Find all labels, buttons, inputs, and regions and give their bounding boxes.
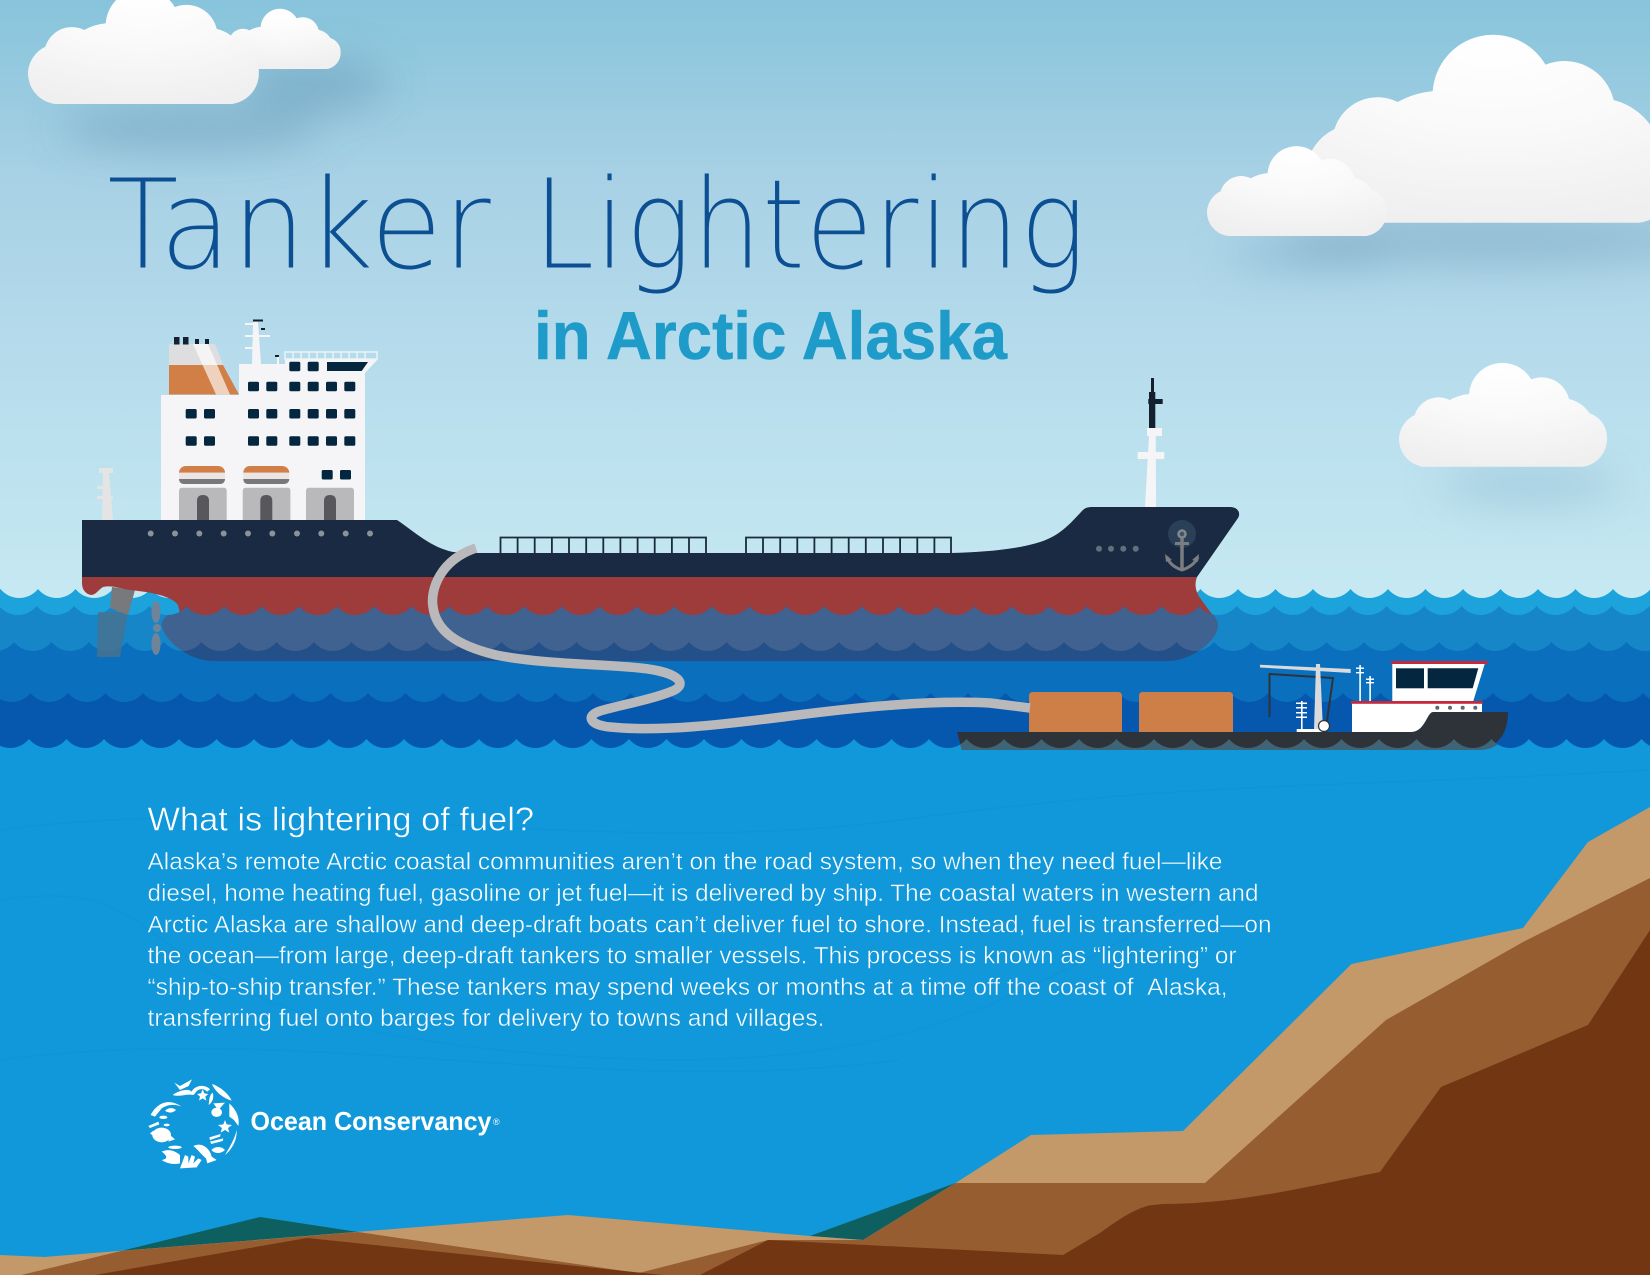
propeller xyxy=(152,601,161,655)
orange cargo tank right xyxy=(1139,692,1233,732)
body text: diesel, home heating fuel, gasoline or jet fuel—it is delivered by ship. The coastal waters in western and xyxy=(148,880,1258,907)
orange cargo tank left xyxy=(1029,692,1122,732)
body text: Alaska’s remote Arctic coastal communities aren’t on the road system, so when they need fuel—like xyxy=(148,848,1222,876)
tan right slope xyxy=(780,807,1650,1275)
rear mast xyxy=(97,468,113,520)
tan left hill xyxy=(0,1215,863,1275)
cloud: front left xyxy=(28,0,259,104)
logo wordmark: Ocean Conservancy xyxy=(250,1106,492,1136)
tug hull xyxy=(1352,703,1482,732)
teal back hills xyxy=(121,1183,956,1251)
bridge railing xyxy=(285,352,377,359)
body text: “ship-to-ship transfer.” These tankers may spend weeks or months at a time off the coast of Alaska, xyxy=(148,974,1228,1001)
bow portholes xyxy=(1096,546,1139,552)
deck railings xyxy=(500,538,951,554)
cloud shadows xyxy=(60,59,1650,505)
hull portholes xyxy=(148,530,373,536)
forward mast xyxy=(1138,378,1164,507)
lifeboats xyxy=(179,466,289,484)
seabed terrain xyxy=(0,807,1650,1275)
funnel xyxy=(169,337,239,394)
barge and tugboat xyxy=(957,661,1508,750)
body text xyxy=(148,848,1272,1032)
underwater hull xyxy=(162,606,1218,661)
doors xyxy=(179,488,354,520)
barge hull xyxy=(957,712,1508,750)
dark brown left hill xyxy=(95,1238,663,1275)
icon: ring of sea creatures xyxy=(148,1079,239,1168)
body text: Arctic Alaska are shallow and deep-draft boats can’t deliver fuel to shore. Instead, fuel is transferred—on xyxy=(148,912,1272,938)
cloud: small right xyxy=(1207,146,1387,236)
fuel transfer hose xyxy=(432,548,1030,729)
cloud: lower right xyxy=(1399,363,1607,467)
crane xyxy=(1260,664,1351,732)
navy upper hull xyxy=(82,507,1239,577)
cloud: small back left xyxy=(220,9,341,69)
radar mast xyxy=(245,320,279,365)
title: Lightering xyxy=(533,153,1086,298)
body text: transferring fuel onto barges for delivery to towns and villages. xyxy=(148,1005,824,1032)
logo: Ocean Conservancy xyxy=(148,1079,500,1168)
mid brown right slope xyxy=(631,878,1650,1275)
superstructure xyxy=(161,359,378,520)
red lower hull xyxy=(82,577,1214,622)
title xyxy=(107,153,1086,298)
dark brown right slope xyxy=(700,930,1650,1275)
tanker ship xyxy=(0,320,1650,1178)
tug portholes xyxy=(1435,706,1477,710)
superstructure windows xyxy=(186,362,368,480)
section heading: What is lightering of fuel? xyxy=(148,800,534,838)
deck antennas xyxy=(1296,665,1374,730)
registered mark: ® xyxy=(493,1117,500,1127)
title: Tanker xyxy=(107,153,492,298)
barge underwater hull xyxy=(960,739,1498,750)
body text: the ocean—from large, deep-draft tankers to smaller vessels. This process is known as “lightering” or xyxy=(148,942,1236,970)
icon: anchor xyxy=(1165,520,1199,570)
cloud: large right xyxy=(1306,35,1650,223)
tug cabin xyxy=(1351,661,1488,704)
sky background xyxy=(0,0,1650,640)
ocean wave layers xyxy=(0,589,1650,1275)
mid brown left hill xyxy=(21,1232,640,1275)
subtitle: in Arctic Alaska xyxy=(534,298,1008,374)
rudder xyxy=(97,587,135,657)
